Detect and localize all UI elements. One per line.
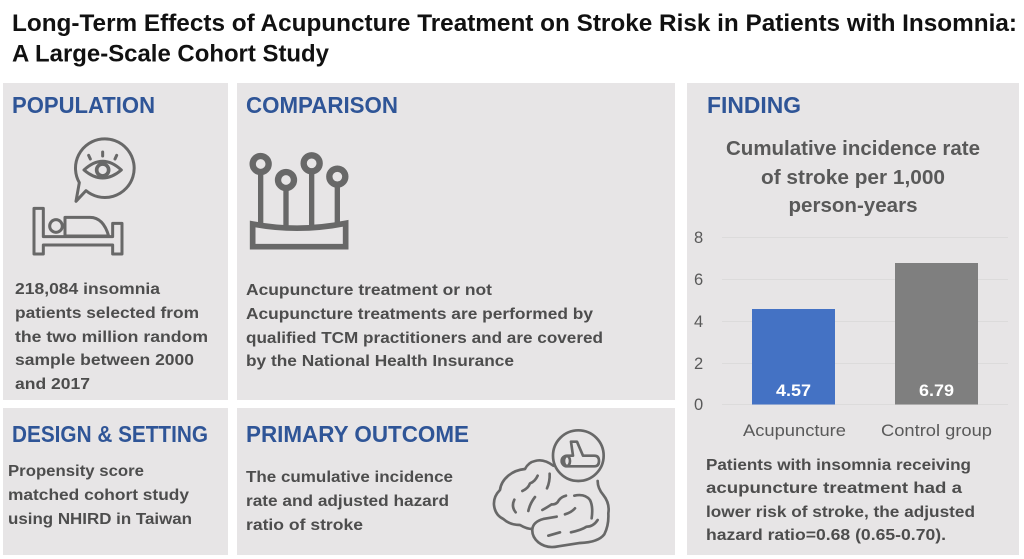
heading: primary outcome: PRIMARY OUTCOME — [246, 421, 469, 447]
text: comparison description: qualified TCM practitioners and are covered — [246, 330, 603, 347]
text: finding conclusion: Patients with insomnia receiving — [706, 457, 971, 474]
title: Long-Term Effects of Acupuncture Treatment on Stroke Risk in Patients with Insomnia: — [12, 10, 1017, 37]
y axis labels: 8 — [694, 229, 703, 247]
chart title: of stroke per 1,000 — [761, 166, 945, 189]
text: finding conclusion: lower risk of stroke, the adjusted — [706, 504, 975, 521]
x axis labels: Control group — [881, 422, 992, 440]
text: outcome description: rate and adjusted hazard — [246, 493, 449, 510]
text: population description: 218,084 insomnia — [15, 281, 160, 298]
text: population description — [15, 281, 208, 393]
chart title: Cumulative incidence rate — [726, 137, 980, 160]
y axis labels: 0 — [694, 396, 703, 414]
y axis labels: 2 — [694, 355, 703, 373]
panel: design and setting — [3, 408, 228, 555]
heading: population: POPULATION — [12, 92, 155, 118]
text: comparison description — [246, 282, 603, 370]
y axis labels: 4 — [694, 313, 703, 331]
text: population description: the two million random — [15, 329, 208, 346]
text: finding conclusion: acupuncture treatment had a — [706, 480, 962, 497]
text: finding conclusion: hazard ratio=0.68 (0.65-0.70). — [706, 527, 946, 544]
y axis labels: 6 — [694, 271, 703, 289]
panel: finding — [687, 83, 1019, 555]
heading: finding: FINDING — [707, 92, 801, 118]
x axis labels: Acupuncture — [743, 422, 846, 440]
text: comparison description: Acupuncture treatments are performed by — [246, 306, 593, 323]
chart title: person-years — [788, 194, 918, 217]
x axis labels — [743, 422, 992, 440]
text: population description: sample between 2000 — [15, 352, 194, 369]
bar chart — [694, 229, 1008, 440]
heading: design and setting: DESIGN & SETTING — [12, 421, 208, 447]
icon: sleepless eye in bed — [34, 139, 134, 254]
panel: primary outcome — [237, 408, 675, 555]
y axis labels — [694, 229, 703, 414]
title — [12, 10, 1017, 68]
bar: acupuncture 4.57 — [752, 309, 835, 404]
bar: control group 6.79 — [895, 263, 978, 404]
bar: acupuncture 4.57: 4.57 — [776, 381, 811, 400]
icon: acupuncture needles — [253, 155, 346, 247]
text: finding conclusion — [706, 457, 975, 544]
text: comparison description: by the National Health Insurance — [246, 353, 514, 370]
text: design description: Propensity score — [8, 463, 144, 480]
chart title — [726, 137, 980, 217]
text: comparison description: Acupuncture treatment or not — [246, 282, 493, 299]
panel: population — [3, 83, 228, 400]
icon: brain with stroke marker — [494, 430, 609, 547]
text: outcome description: The cumulative incidence — [246, 469, 453, 486]
panel: comparison — [237, 83, 675, 400]
text: outcome description — [246, 469, 453, 534]
text: outcome description: ratio of stroke — [246, 517, 363, 534]
text: design description — [8, 463, 192, 528]
text: design description: matched cohort study — [8, 487, 189, 504]
bar: control group 6.79: 6.79 — [919, 381, 954, 400]
text: design description: using NHIRD in Taiwan — [8, 511, 192, 528]
title: A Large-Scale Cohort Study — [12, 40, 329, 68]
text: population description: and 2017 — [15, 376, 90, 393]
text: population description: patients selected from — [15, 305, 199, 322]
heading: comparison: COMPARISON — [246, 92, 398, 118]
